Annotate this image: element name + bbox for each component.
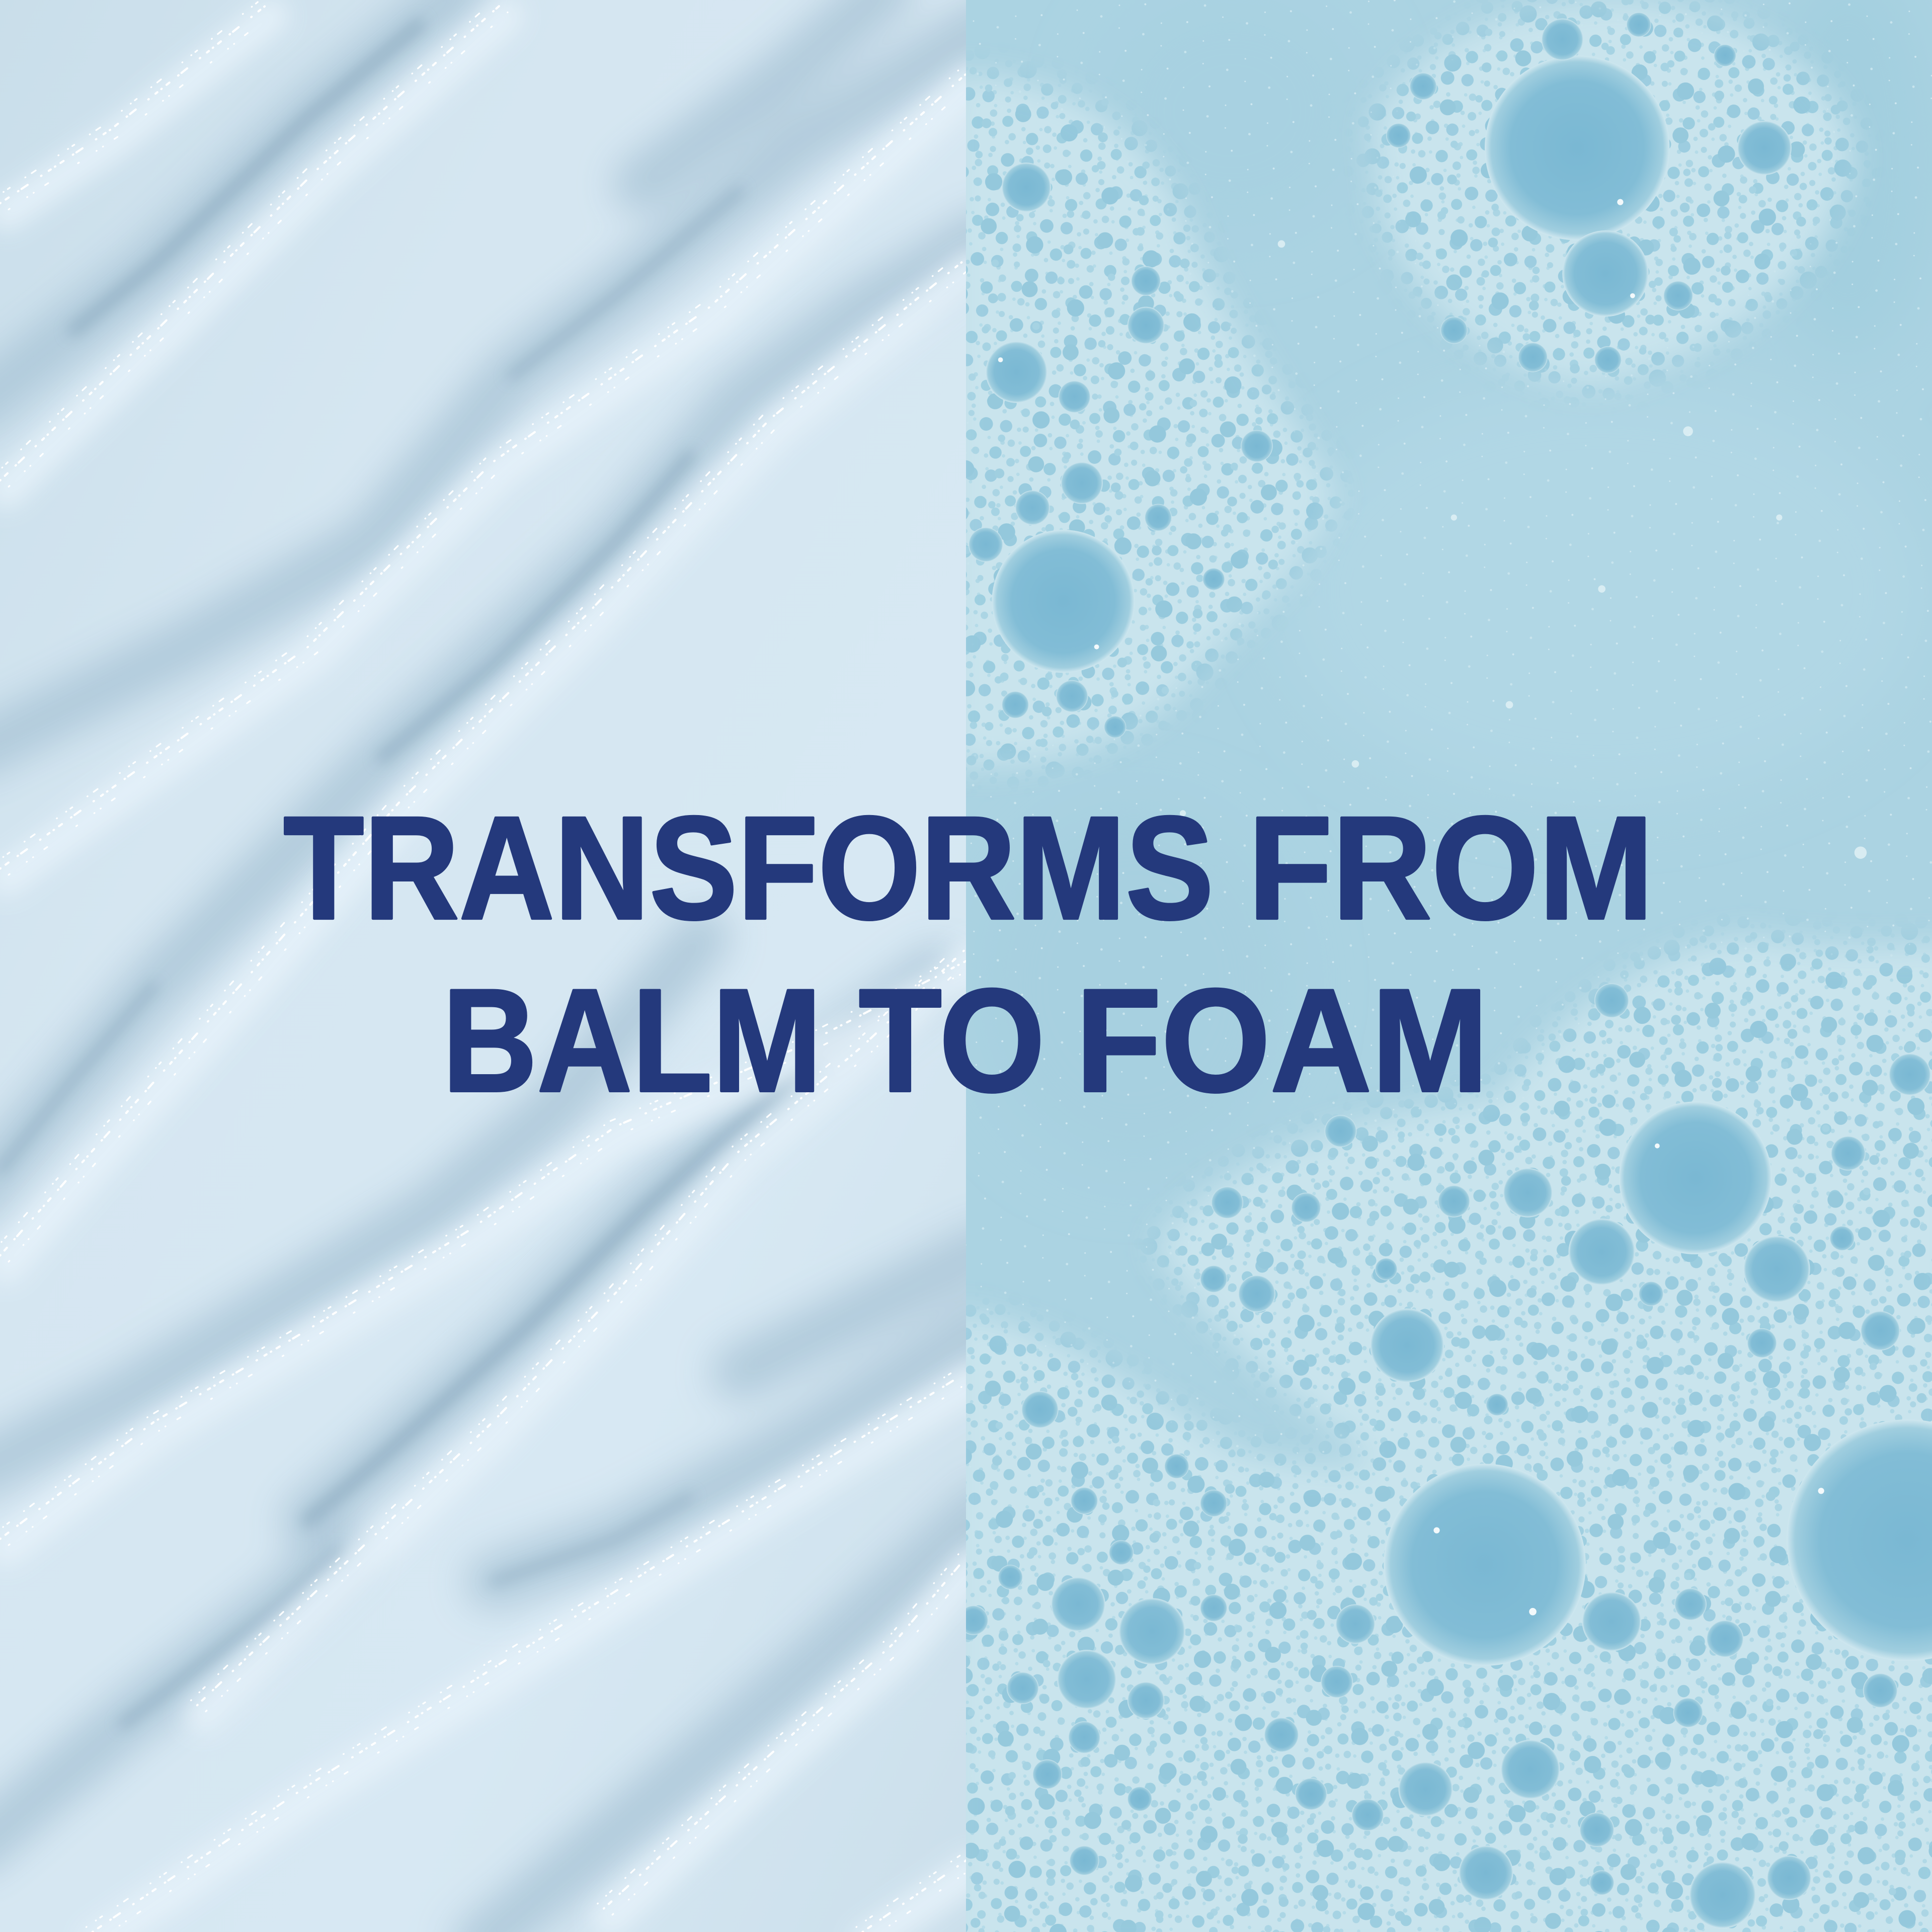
panel: balm texture	[0, 0, 986, 1932]
foam flecks	[1180, 240, 1867, 859]
balm glossy highlights	[0, 1, 975, 1932]
title line 2: BALM	[442, 958, 822, 1122]
title line 2: TO	[859, 958, 1045, 1122]
title line 1: FROM	[1248, 786, 1654, 950]
title line 2	[442, 958, 1488, 1122]
bubble glints	[998, 199, 1824, 1616]
title line 1: TRANSFORMS	[283, 786, 1214, 950]
balm dark crease lines	[0, 25, 887, 1724]
title	[283, 786, 1654, 1122]
foam water tone	[974, 0, 1932, 1171]
large bubbles	[958, 12, 1932, 1928]
title line 2: FOAM	[1076, 958, 1488, 1122]
balm light ridges	[6, 16, 972, 1932]
water flecks	[966, 0, 1932, 1932]
foam patches	[966, 0, 1932, 1932]
balm soft shadow folds	[0, 0, 986, 1932]
panel: foam texture	[958, 0, 1932, 1932]
